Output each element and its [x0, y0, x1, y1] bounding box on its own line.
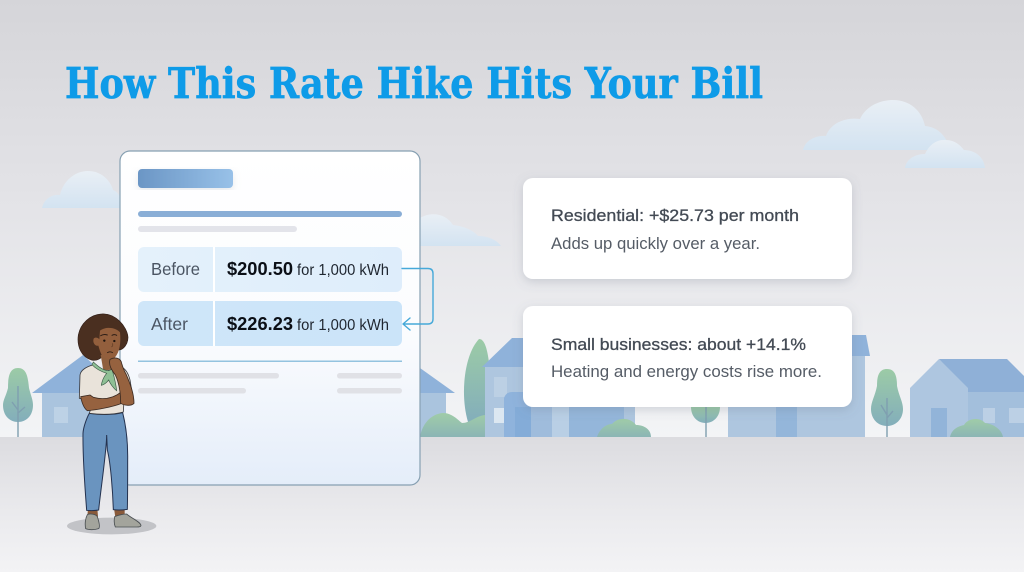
neck [101, 355, 113, 371]
scarf [92, 362, 117, 391]
ankles [87, 508, 125, 517]
hair [78, 314, 128, 360]
panel: bill document [120, 151, 420, 485]
raised arm and hand [110, 358, 134, 405]
row: after: $226.23 [227, 313, 293, 334]
bill subheading line [138, 226, 297, 232]
arrow: before to after [402, 268, 433, 330]
card: small businesses [523, 306, 852, 407]
bill header bar [138, 169, 233, 188]
row: before [138, 247, 402, 292]
folded forearm [81, 392, 122, 411]
tree: center [691, 400, 720, 437]
row: before: Before [151, 259, 200, 279]
bill heading line [138, 211, 402, 217]
shoes [85, 514, 141, 530]
background sky [0, 0, 1024, 438]
house: center right [728, 335, 870, 437]
cloud: left [42, 171, 122, 208]
card: residential: Adds up quickly over a year. [551, 234, 760, 253]
house: far right [910, 359, 1024, 437]
card: residential: Residential: +$25.73 per month [551, 206, 799, 225]
card: residential [523, 178, 852, 279]
house: left behind person [32, 355, 125, 437]
face [93, 328, 120, 359]
row: before: for 1,000 kWh [297, 262, 389, 279]
tree: tall cypress [464, 339, 490, 422]
row: after: After [151, 314, 188, 334]
cloud: top right small [905, 140, 985, 168]
card: small businesses: Heating and energy costs rise more. [551, 362, 822, 381]
bush: center [597, 419, 651, 437]
shirt [79, 365, 133, 414]
tree: far left [3, 368, 33, 437]
row: before: $200.50 [227, 258, 293, 279]
row: after: for 1,000 kWh [297, 317, 389, 334]
cloud: behind bill [420, 214, 501, 246]
house: behind bill right edge [420, 368, 455, 437]
house: center left [482, 338, 635, 437]
title: How This Rate Hike Hits Your Bill [65, 59, 763, 109]
trousers [83, 413, 128, 511]
tree: right [871, 369, 903, 437]
cloud: top right large [803, 100, 948, 150]
card: small businesses: Small businesses: about +14.1% [551, 335, 806, 354]
ground [0, 437, 1024, 572]
row: after [138, 301, 402, 346]
bush: center left [420, 413, 485, 437]
person: thinking woman [67, 314, 156, 534]
shadow [67, 518, 156, 534]
